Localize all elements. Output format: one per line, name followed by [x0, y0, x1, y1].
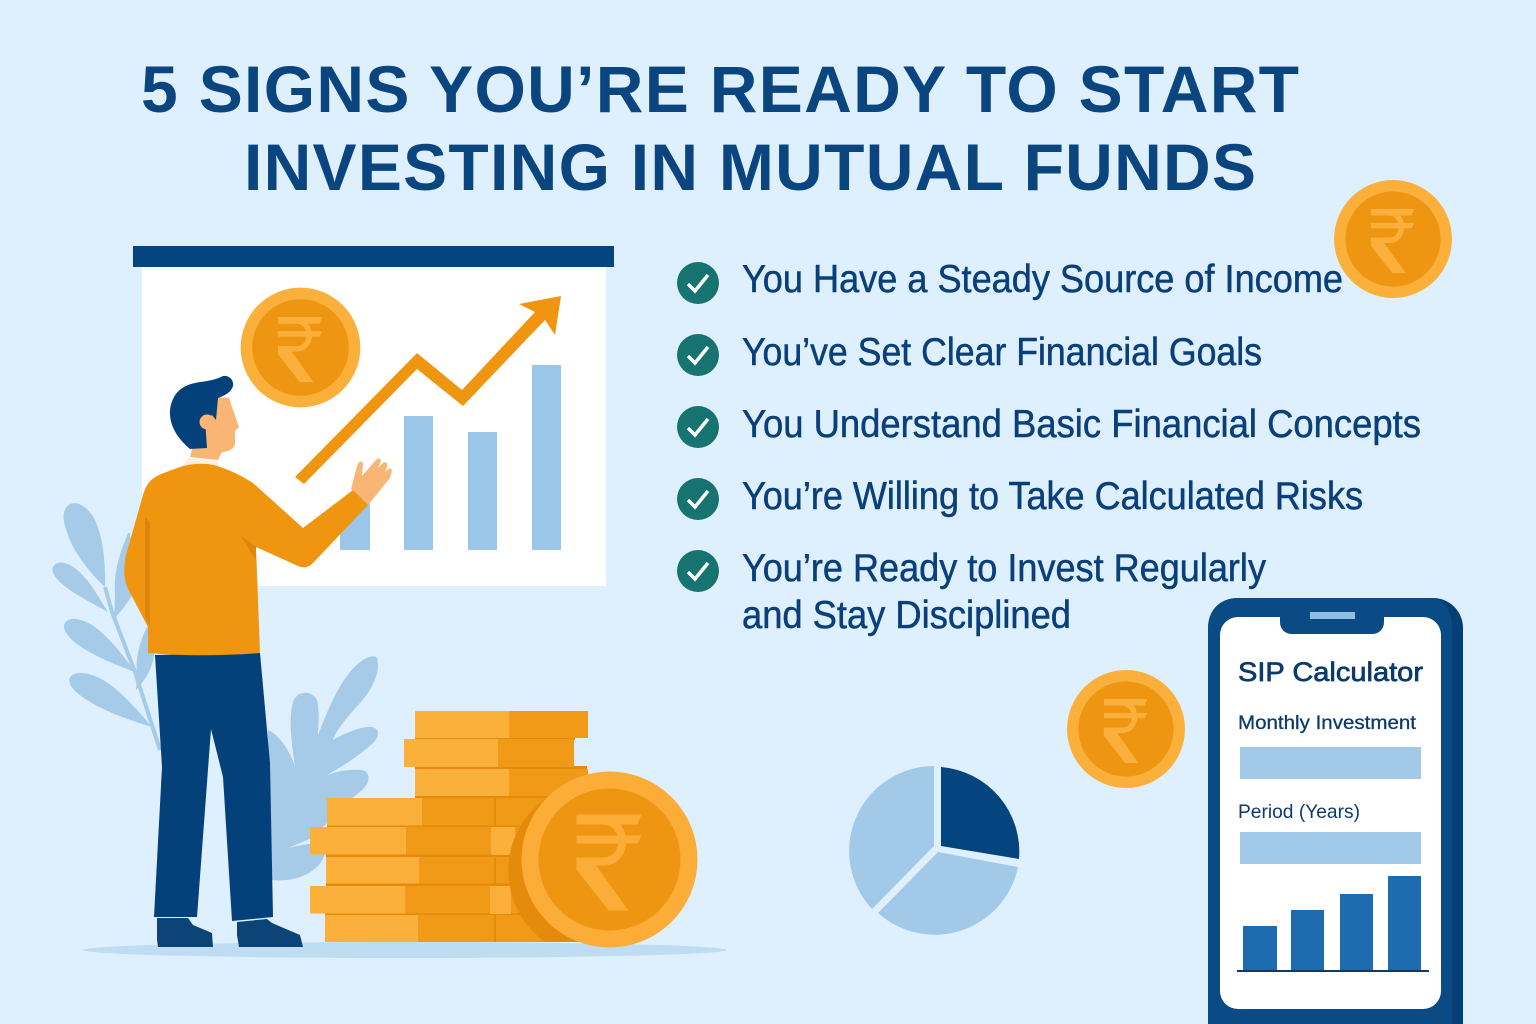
ear	[200, 414, 214, 430]
calculator heading: SIP Calculator	[1238, 657, 1423, 687]
right plant	[268, 656, 378, 880]
phone: SIP calculator	[1208, 598, 1463, 1024]
bottom stack	[310, 798, 552, 942]
item 5: and Stay Disciplined	[742, 594, 1071, 637]
phone body	[1208, 598, 1463, 1024]
sweater	[124, 464, 368, 655]
period label: Period (Years)	[1238, 801, 1360, 823]
checklist	[677, 258, 1421, 637]
notch	[1280, 612, 1384, 634]
phone bar chart	[1237, 876, 1429, 972]
speaker	[1310, 612, 1355, 619]
item 5: You’re Ready to Invest Regularly	[742, 547, 1266, 590]
bar chart on board	[340, 365, 561, 550]
neck and face	[190, 397, 239, 460]
item 1: You Have a Steady Source of Income	[742, 258, 1343, 301]
title	[141, 52, 1299, 204]
title: INVESTING IN MUTUAL FUNDS	[244, 130, 1256, 204]
coin stacks	[310, 711, 698, 948]
growth arrow	[295, 296, 561, 484]
item 3: You Understand Basic Financial Concepts	[742, 403, 1421, 446]
title: 5 SIGNS YOU’RE READY TO START	[141, 52, 1299, 126]
screen	[1220, 617, 1441, 1009]
ground shadow	[83, 942, 727, 958]
large coin shadow	[508, 799, 640, 942]
item 5	[677, 547, 1266, 637]
sweater shading	[145, 517, 256, 627]
pie chart	[849, 766, 1019, 935]
monthly investment label: Monthly Investment	[1238, 712, 1417, 734]
shoes	[157, 918, 303, 947]
rupee coin on board	[241, 288, 360, 407]
trousers	[154, 653, 273, 921]
large rupee coin	[522, 772, 698, 948]
stack seams	[325, 737, 587, 916]
collar	[183, 458, 220, 468]
hand	[351, 458, 392, 505]
left plant	[52, 503, 160, 750]
item 4: You’re Willing to Take Calculated Risks	[742, 475, 1363, 518]
top stack	[404, 711, 588, 796]
monthly investment field	[1240, 747, 1421, 779]
person	[124, 376, 392, 947]
period field	[1240, 832, 1421, 864]
item 2: You’ve Set Clear Financial Goals	[742, 331, 1262, 374]
hair	[170, 376, 233, 449]
presentation board	[133, 246, 614, 586]
rupee coin middle	[1067, 670, 1185, 788]
rupee coin top right	[1334, 180, 1452, 298]
